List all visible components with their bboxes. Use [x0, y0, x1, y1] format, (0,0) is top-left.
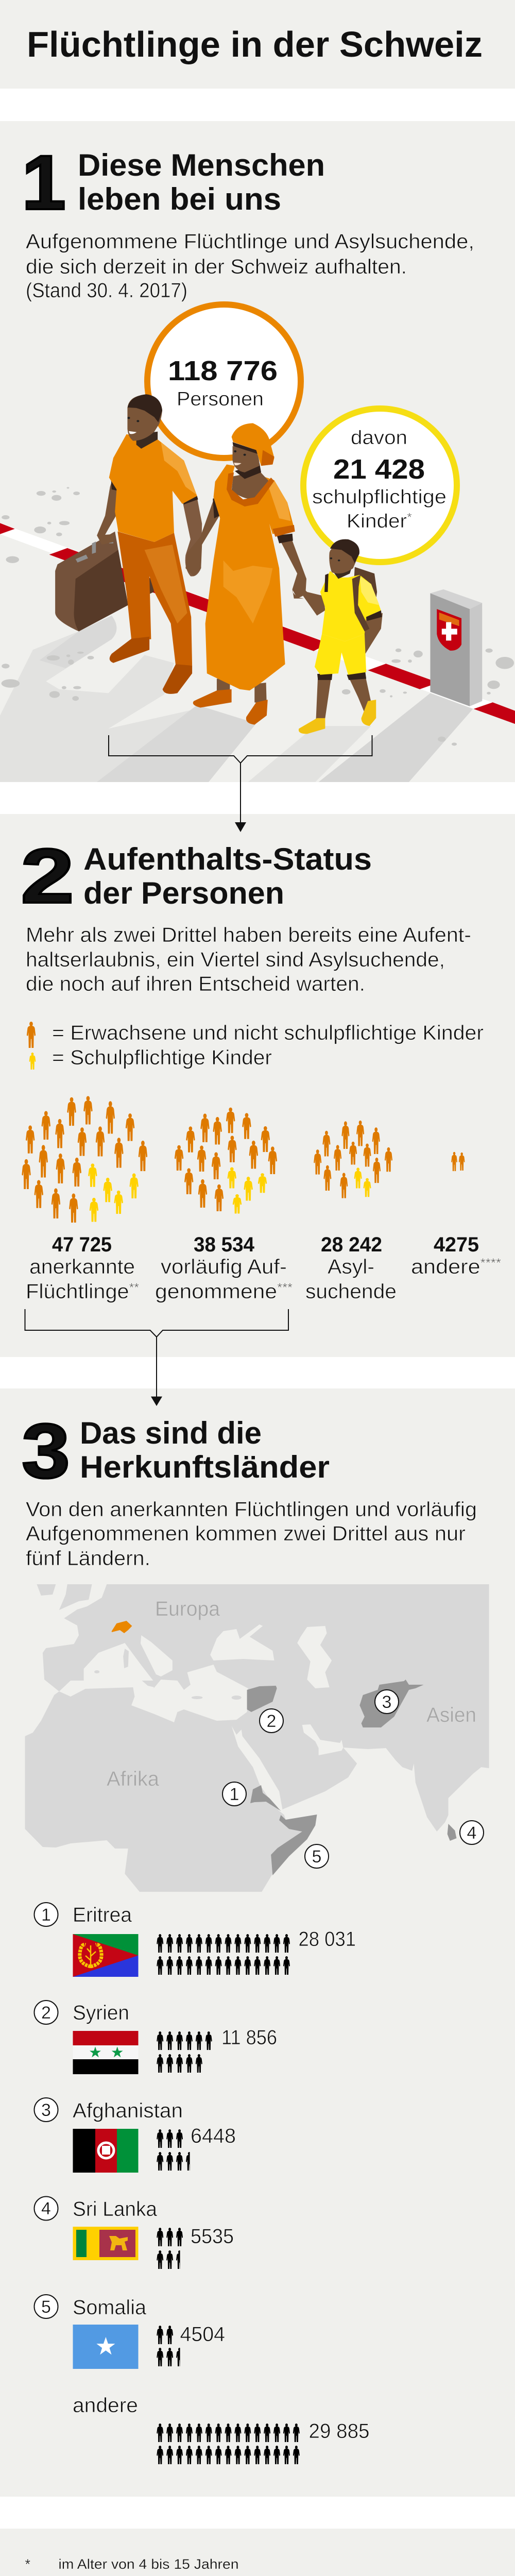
label: asylum seekers: suchende	[305, 1280, 397, 1303]
number 1: 1	[22, 139, 66, 226]
label: provisionally admitted: genommene	[155, 1280, 269, 1303]
map: Afghanistan	[359, 1680, 424, 1727]
row: Syria: 2	[41, 2003, 51, 2023]
intro text 2: die noch auf ihren Entscheid warten.	[26, 973, 365, 995]
map marker 1	[222, 1782, 246, 1806]
label: asylum seekers: 28 242	[321, 1233, 382, 1256]
icon row: Eritrea	[157, 1934, 300, 1975]
map labels	[107, 1598, 476, 1790]
map marker 4	[460, 1821, 484, 1844]
intro text 2: haltserlaubnis, ein Viertel sind Asylsuchende,	[26, 948, 445, 971]
intro text 3: fünf Ländern.	[26, 1547, 150, 1570]
legend	[27, 1022, 484, 1070]
circle: school-age children: 21 428	[333, 454, 425, 485]
chart: people clusters	[22, 1096, 465, 1223]
icon row: Afghanistan	[157, 2129, 300, 2171]
map marker 3: 3	[382, 1692, 391, 1712]
map: seas	[59, 1624, 343, 1816]
flag: Syria	[73, 2031, 138, 2074]
intro text 3: Aufgenommenen kommen zwei Drittel aus nur	[26, 1522, 466, 1545]
heading 2: der Personen	[83, 876, 284, 910]
map: Somalia	[271, 1815, 317, 1875]
circle: school-age children: Kinder	[347, 511, 403, 532]
icon row: others	[157, 2424, 300, 2464]
illustration: family and border post	[55, 394, 482, 734]
map marker 5	[305, 1844, 329, 1868]
map labels: Europa	[155, 1598, 220, 1620]
icon: child	[29, 1053, 36, 1070]
number 3: 3	[22, 1408, 70, 1494]
heading 2: Aufenthalts-Status	[83, 842, 372, 876]
label: provisionally admitted: 38 534	[194, 1233, 255, 1256]
row: Eritrea: Eritrea	[73, 1904, 132, 1926]
footnotes: *	[25, 2556, 31, 2572]
intro text 1: (Stand 30. 4. 2017)	[26, 279, 187, 302]
row: others: andere	[73, 2394, 138, 2417]
heading 1: leben bei uns	[78, 182, 281, 216]
label: others	[411, 1233, 501, 1278]
map: Syria	[247, 1686, 277, 1712]
row: Somalia	[34, 2295, 300, 2369]
row: Eritrea: 1	[41, 1905, 51, 1925]
intro text 1: die sich derzeit in der Schweiz aufhalten.	[26, 256, 407, 278]
icon: suitcase	[55, 532, 153, 632]
number 2: 2	[21, 833, 74, 919]
heading 3: Herkunftsländer	[80, 1450, 330, 1484]
row: Afghanistan: 3	[41, 2100, 51, 2120]
cluster: provisionally admitted	[175, 1108, 277, 1214]
icon: adult	[27, 1022, 36, 1048]
row: Syria: Syrien	[73, 2002, 129, 2024]
circle: total persons	[147, 304, 301, 458]
row: Sri Lanka	[34, 2197, 300, 2269]
bracket and arrow to section 2	[109, 735, 372, 824]
label: recognised refugees: **	[129, 1281, 139, 1295]
row: others	[73, 2394, 370, 2464]
icon row: Sri Lanka	[157, 2228, 300, 2269]
row: Syria	[34, 2001, 300, 2074]
heading 3: Das sind die	[80, 1416, 262, 1450]
row: Sri Lanka: Sri Lanka	[73, 2198, 158, 2221]
map marker 5: 5	[312, 1847, 321, 1867]
intro text 1: Aufgenommene Flüchtlinge und Asylsuchende,	[26, 230, 474, 253]
intro text 2: Mehr als zwei Drittel haben bereits eine Aufent-	[26, 924, 471, 946]
circle: school-age children	[303, 409, 457, 562]
panel: section 1 people	[0, 121, 515, 824]
label: provisionally admitted	[155, 1233, 293, 1303]
map: Eritrea	[250, 1785, 281, 1811]
label: asylum seekers: Asyl-	[328, 1256, 374, 1278]
bracket and arrow to section 3	[25, 1309, 288, 1397]
flag: Eritrea	[73, 1934, 138, 1977]
row: Afghanistan: Afghanistan	[73, 2099, 183, 2122]
label: asylum seekers	[305, 1233, 397, 1303]
circle: total persons: 118 776	[168, 355, 278, 386]
heading 3	[80, 1416, 330, 1484]
intro text 2	[26, 924, 471, 995]
label: recognised refugees: Flüchtlinge	[26, 1280, 125, 1303]
panel: section 3 origin	[0, 1388, 515, 2497]
row: Eritrea	[34, 1903, 356, 1977]
footnotes	[25, 2556, 435, 2576]
heading 2	[83, 842, 372, 910]
icon row: Syria	[157, 2031, 300, 2073]
map: Switzerland	[112, 1621, 132, 1633]
heading 1: Diese Menschen	[78, 148, 325, 182]
map labels: Afrika	[107, 1768, 160, 1790]
row: Sri Lanka: 5535	[191, 2225, 234, 2248]
map	[25, 1584, 489, 1892]
label: recognised refugees: anerkannte	[29, 1256, 135, 1278]
map marker 2	[260, 1709, 283, 1733]
cluster: asylum seekers	[314, 1121, 392, 1198]
label: others: andere	[411, 1256, 475, 1278]
figure: woman	[185, 423, 306, 725]
intro text 3	[26, 1498, 477, 1570]
row: Afghanistan: 6448	[191, 2125, 236, 2147]
row: Somalia: 4504	[180, 2323, 225, 2346]
icon: border post	[430, 589, 482, 706]
row: Eritrea: 28 031	[299, 1928, 356, 1951]
map marker 4: 4	[467, 1823, 476, 1843]
illustration: ground, shadows and border	[0, 487, 515, 782]
heading 1	[78, 148, 325, 216]
circle: total persons: Personen	[177, 388, 264, 410]
circle: school-age children: *	[407, 511, 412, 524]
row: Somalia: Somalia	[73, 2296, 147, 2319]
label: others: ****	[480, 1256, 501, 1270]
figure: child	[293, 539, 383, 734]
row: Somalia: 5	[41, 2297, 51, 2317]
row: Sri Lanka: 4	[41, 2199, 51, 2218]
flag: Afghanistan	[73, 2129, 138, 2173]
row: others: 29 885	[309, 2420, 370, 2443]
footnotes: im Alter von 4 bis 15 Jahren	[59, 2556, 239, 2572]
cluster: recognised refugees	[22, 1096, 147, 1223]
panel: title	[0, 0, 515, 89]
map labels: Asien	[426, 1704, 476, 1726]
map: land	[25, 1584, 489, 1892]
panel: footnotes and credits	[0, 2529, 515, 2576]
cluster: others	[451, 1152, 465, 1171]
label: recognised refugees	[26, 1233, 139, 1303]
intro text 1	[26, 230, 474, 302]
row: Afghanistan	[34, 2098, 300, 2173]
flag: Sri Lanka	[73, 2227, 138, 2260]
legend: = Erwachsene und nicht schulpflichtige Kinder	[52, 1022, 484, 1044]
flag: Somalia	[73, 2325, 138, 2369]
label: recognised refugees: 47 725	[52, 1233, 112, 1256]
icon row: Somalia	[157, 2326, 300, 2366]
map marker 3	[375, 1690, 399, 1714]
title: Flüchtlinge in der Schweiz	[27, 24, 483, 64]
figure: man	[97, 394, 202, 694]
circle: school-age children: davon	[351, 427, 407, 449]
label: provisionally admitted: vorläufig Auf-	[161, 1256, 287, 1278]
legend: = Schulpflichtige Kinder	[52, 1046, 272, 1069]
row: Syria: 11 856	[221, 2026, 277, 2049]
label: provisionally admitted: ***	[277, 1281, 293, 1295]
map marker 1: 1	[230, 1785, 239, 1804]
map: Sri Lanka	[448, 1824, 456, 1841]
panel: section 2 status	[0, 814, 515, 1397]
circle: school-age children: schulpflichtige	[312, 486, 447, 508]
map marker 2: 2	[267, 1711, 276, 1731]
label: others: 4275	[434, 1233, 479, 1256]
intro text 3: Von den anerkannten Flüchtlingen und vorläufig	[26, 1498, 477, 1521]
